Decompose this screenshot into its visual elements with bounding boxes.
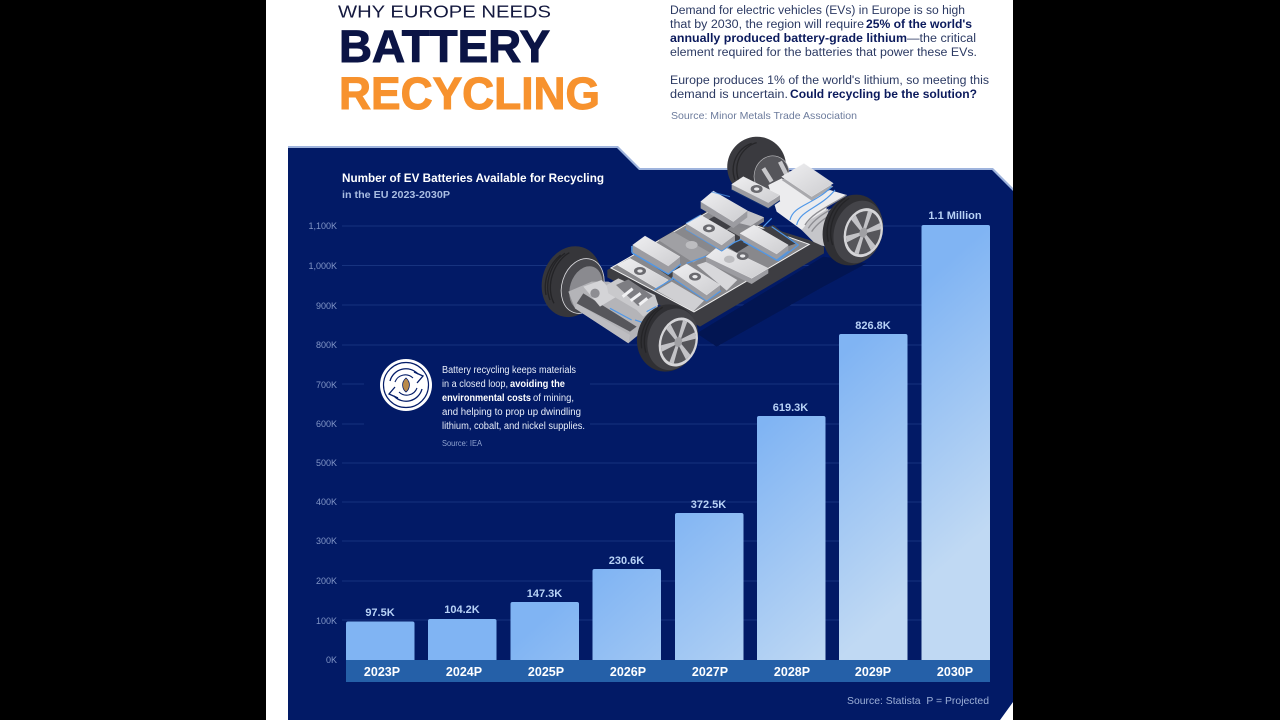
battery module: far xyxy=(732,177,780,209)
callout text: avoiding the xyxy=(510,379,565,390)
front axle and suspension xyxy=(568,280,658,343)
y axis labels: 0K xyxy=(326,655,337,665)
chart source: Source: Statista P = Projected xyxy=(847,695,989,707)
title: BATTERY xyxy=(339,21,550,72)
front motor xyxy=(607,278,658,323)
title: RECYCLING xyxy=(339,68,600,119)
value labels: 147.3K xyxy=(527,588,562,600)
chart panel xyxy=(288,146,1013,720)
value labels: 97.5K xyxy=(365,607,395,619)
battery module: second pair xyxy=(701,191,764,229)
callout text: environmental costs xyxy=(442,393,531,404)
left front wheel xyxy=(533,238,611,325)
y axis labels: 800K xyxy=(316,340,337,350)
callout text: and helping to prop up dwindling xyxy=(442,407,581,418)
y axis labels: 600K xyxy=(316,419,337,429)
floor pad: center grey xyxy=(658,232,710,263)
bars xyxy=(346,225,990,664)
intro text: 25% of the world's xyxy=(866,19,972,31)
value labels xyxy=(365,210,982,619)
year labels: 2025P xyxy=(528,665,564,679)
intro text xyxy=(670,5,989,101)
intro text: Could recycling be the solution? xyxy=(790,89,977,101)
shadow xyxy=(697,257,867,347)
callout text: Battery recycling keeps materials xyxy=(442,365,576,376)
bar chart xyxy=(308,210,990,682)
intro text: annually produced battery-grade lithium xyxy=(670,33,907,45)
chart heading xyxy=(342,171,604,201)
right rear wheel xyxy=(814,187,892,273)
callout text xyxy=(442,365,585,432)
title xyxy=(338,2,600,119)
floor pad: right strip xyxy=(697,262,737,291)
chassis tray xyxy=(607,209,824,327)
gridlines xyxy=(342,226,990,620)
callout source: Source: IEA xyxy=(442,438,482,448)
value labels: 826.8K xyxy=(855,320,891,332)
y axis labels: 200K xyxy=(316,576,337,586)
value labels: 619.3K xyxy=(773,402,808,414)
intro source: Source: Minor Metals Trade Association xyxy=(671,110,857,122)
callout text: of mining, xyxy=(533,393,574,404)
y axis labels: 100K xyxy=(316,616,337,626)
intro text: Demand for electric vehicles (EVs) in Europe is so high xyxy=(670,5,965,17)
floor pad: front xyxy=(657,282,704,311)
front right wheel xyxy=(628,296,706,380)
intro text: element required for the batteries that power these EVs. xyxy=(670,47,977,59)
intro text: demand is uncertain. xyxy=(670,89,788,101)
value labels: 372.5K xyxy=(691,499,726,511)
title: WHY EUROPE NEEDS xyxy=(338,2,551,22)
callout text: in a closed loop, xyxy=(442,379,508,390)
icon: recycling loop with leaf xyxy=(380,359,432,411)
intro text: Europe produces 1% of the world's lithium, so meeting this xyxy=(670,75,989,87)
chassis floor xyxy=(611,210,809,312)
y axis labels: 900K xyxy=(316,301,337,311)
year labels: 2030P xyxy=(937,665,973,679)
intro text: —the critical xyxy=(907,33,976,45)
year labels: 2026P xyxy=(610,665,646,679)
floor gaps xyxy=(645,215,797,280)
year labels: 2023P xyxy=(364,665,400,679)
y axis labels xyxy=(308,221,337,665)
far wheel xyxy=(719,128,795,205)
battery module: left raised xyxy=(632,236,681,274)
value labels: 230.6K xyxy=(609,555,644,567)
coolant lines xyxy=(654,218,798,290)
battery module: third xyxy=(685,215,735,251)
year labels: 2029P xyxy=(855,665,891,679)
intro text: that by 2030, the region will require xyxy=(670,19,864,31)
year labels xyxy=(364,665,973,679)
y axis labels: 500K xyxy=(316,458,337,468)
y axis labels: 1,100K xyxy=(308,221,337,231)
page background xyxy=(266,0,1013,720)
value labels: 1.1 Million xyxy=(928,210,982,222)
battery module: front raised xyxy=(672,264,721,301)
y axis labels: 700K xyxy=(316,380,337,390)
y axis labels: 300K xyxy=(316,536,337,546)
illustration: EV chassis xyxy=(533,128,892,380)
battery module: right xyxy=(740,225,788,260)
chart heading: in the EU 2023-2030P xyxy=(342,189,450,201)
year labels: 2028P xyxy=(774,665,810,679)
value labels: 104.2K xyxy=(444,604,480,616)
rear motor xyxy=(768,163,850,247)
y axis labels: 400K xyxy=(316,497,337,507)
y axis labels: 1,000K xyxy=(308,261,337,271)
chart heading: Number of EV Batteries Available for Recycling xyxy=(342,171,604,185)
floor pad: left xyxy=(617,258,668,288)
year labels: 2024P xyxy=(446,665,482,679)
year labels: 2027P xyxy=(692,665,728,679)
battery module: center right xyxy=(706,245,768,284)
year strip xyxy=(346,660,990,682)
callout text: lithium, cobalt, and nickel supplies. xyxy=(442,421,585,432)
